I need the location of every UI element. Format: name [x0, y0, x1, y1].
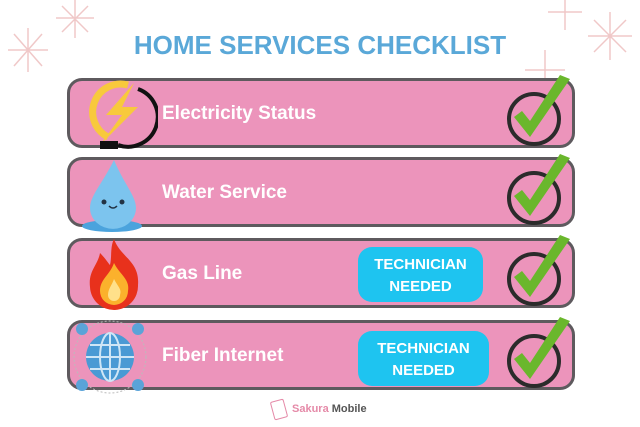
- icon: water drop: [82, 160, 142, 232]
- label: Fiber Internet: [162, 345, 283, 366]
- row: electricity: [67, 78, 575, 148]
- icon: globe network: [74, 320, 146, 394]
- checkmark: [507, 75, 570, 146]
- checkmark: [507, 235, 570, 306]
- row: water: [67, 157, 575, 227]
- badge: NEEDED: [389, 278, 452, 295]
- badge: [358, 247, 483, 302]
- badge: TECHNICIAN: [377, 340, 470, 357]
- badge: [358, 331, 489, 386]
- icon: lightning plug: [89, 80, 158, 149]
- label: Water Service: [162, 182, 287, 203]
- checkmark: [507, 317, 570, 388]
- label: Electricity Status: [162, 103, 316, 124]
- badge: NEEDED: [392, 362, 455, 379]
- label: Gas Line: [162, 263, 242, 284]
- logo: Sakura Mobile: Sakura Mobile: [292, 403, 367, 415]
- logo: Sakura Mobile: [270, 398, 367, 420]
- title: HOME SERVICES CHECKLIST: [134, 30, 506, 60]
- row: gas: [67, 238, 575, 308]
- badge: TECHNICIAN: [374, 256, 467, 273]
- icon: flame: [90, 239, 138, 310]
- row: fiber: [67, 320, 575, 390]
- checkmark: [507, 154, 570, 225]
